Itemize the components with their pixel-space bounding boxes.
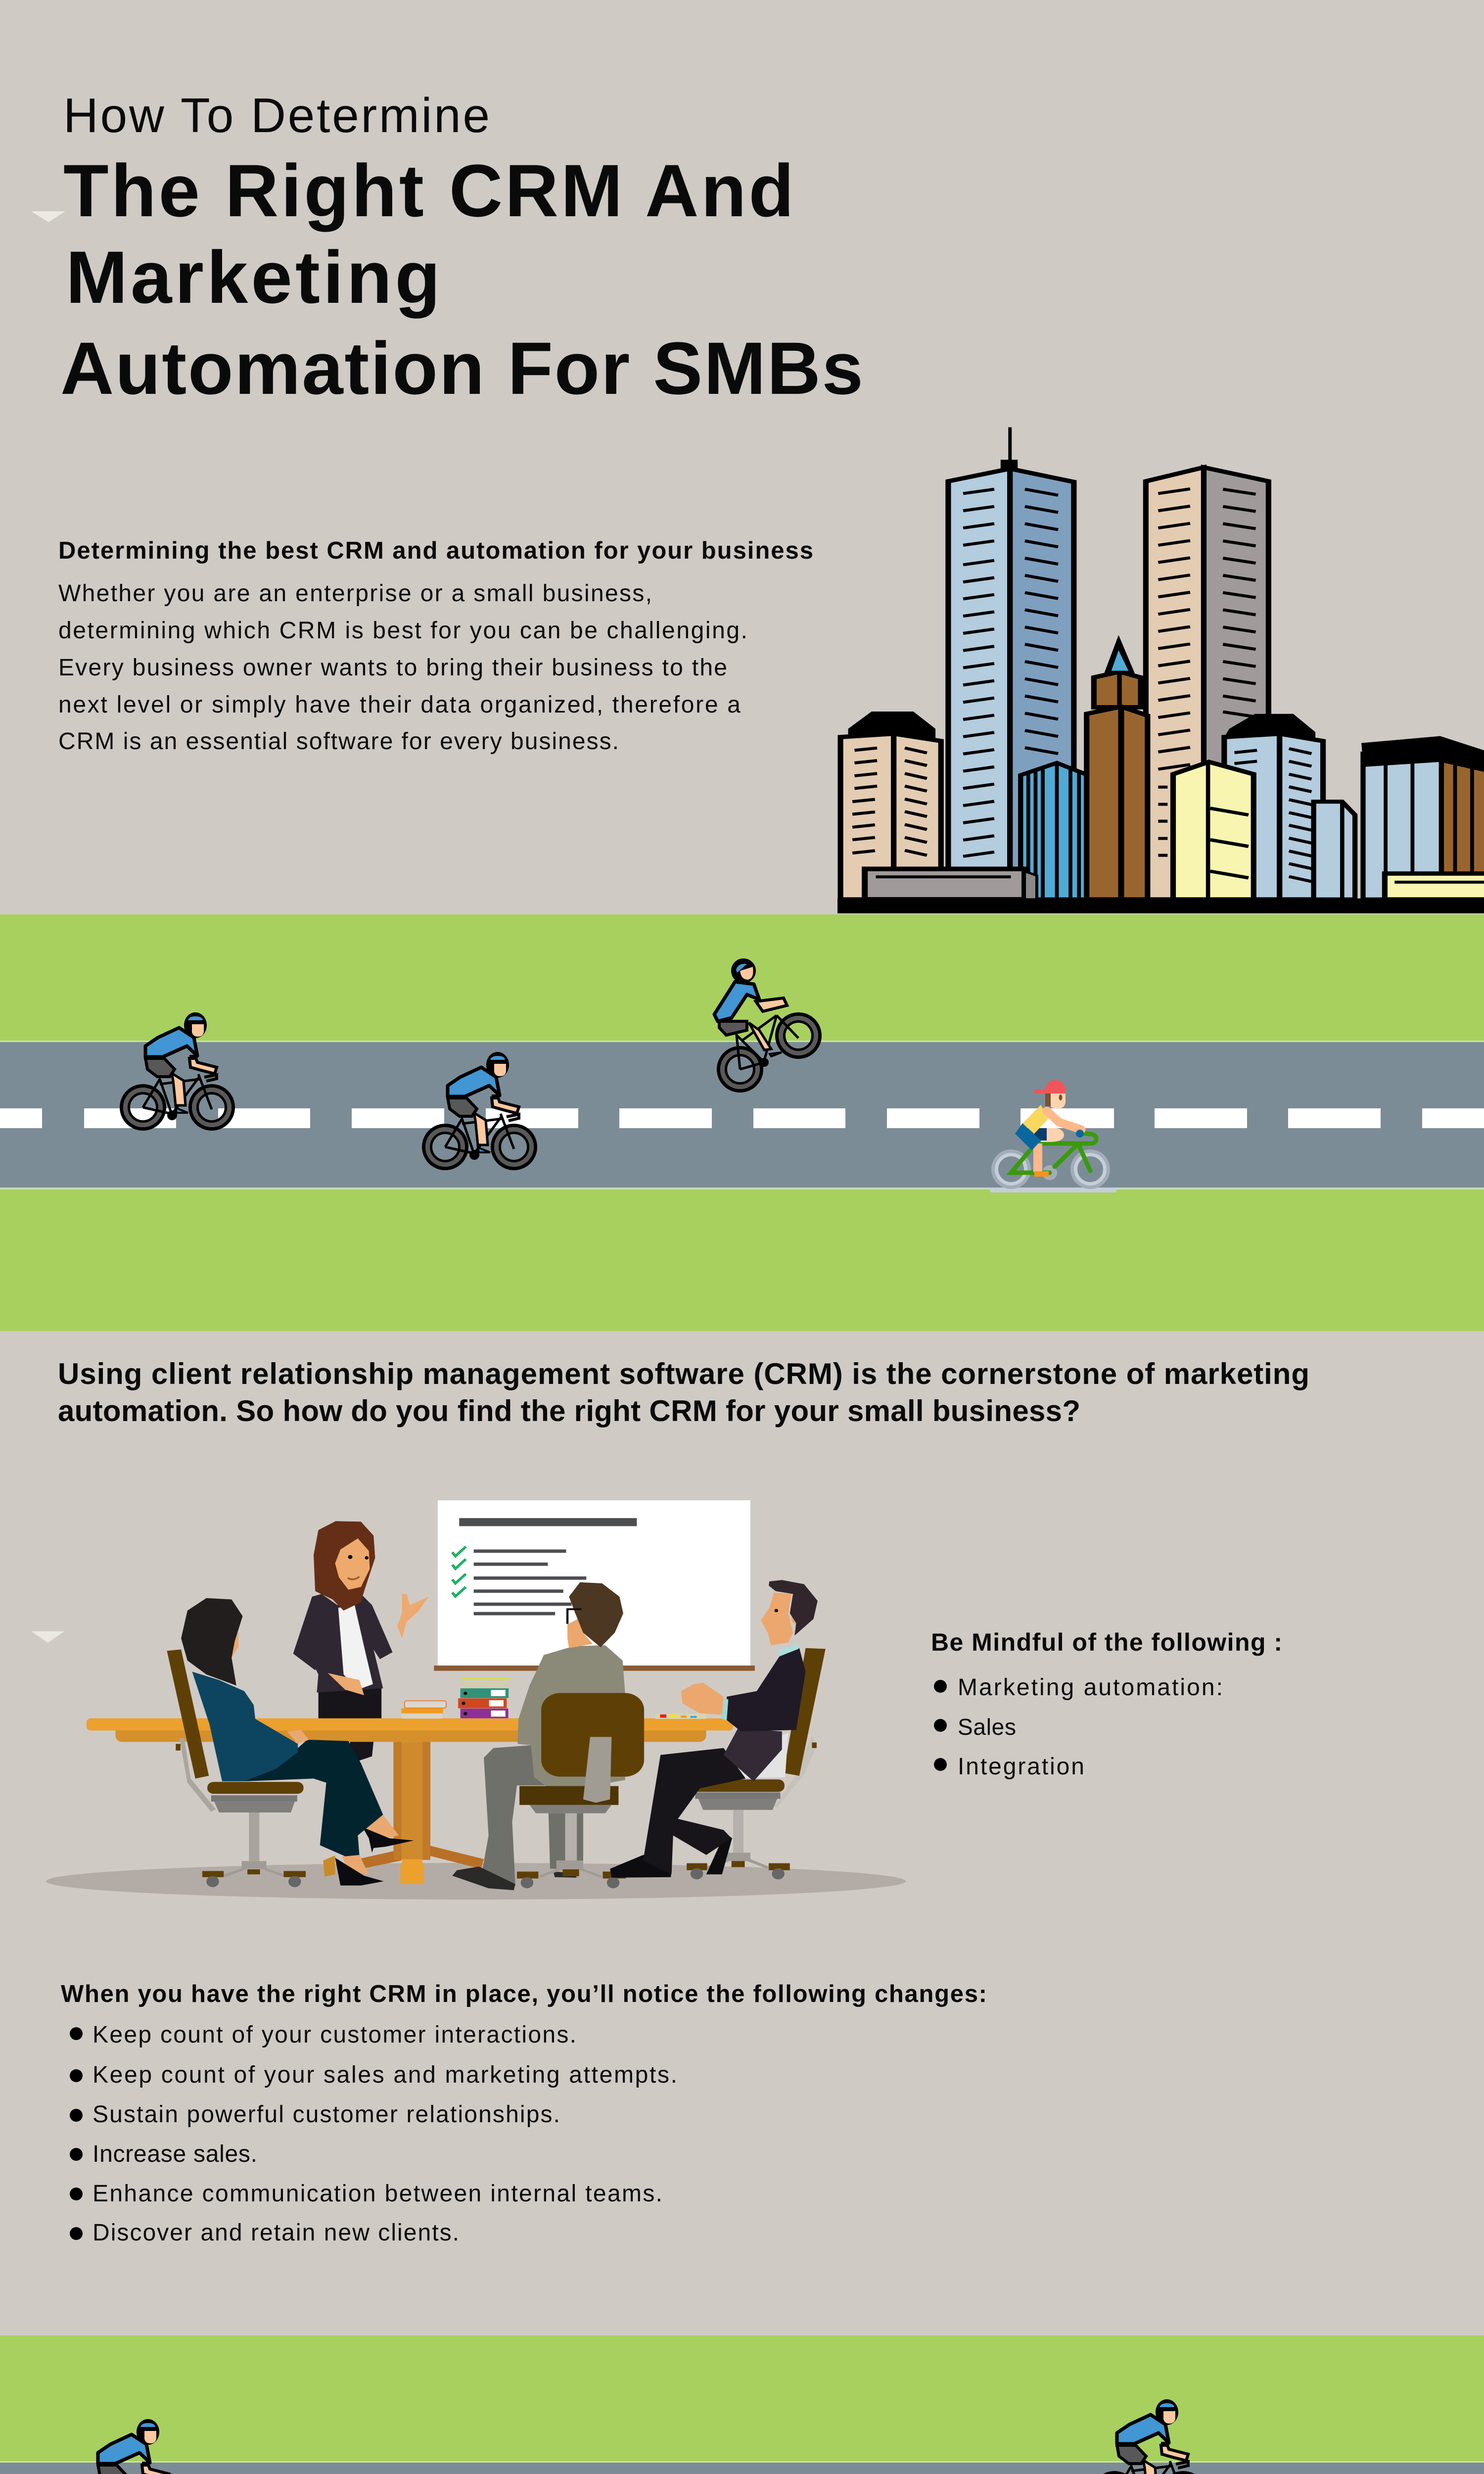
text block: changes list: When you have the right CRM in place, you’ll notice the following changes:: [61, 1981, 987, 2007]
man from behind: [452, 1582, 644, 1890]
text block: introduction: [58, 537, 813, 755]
title: Marketing: [66, 236, 440, 319]
text block: introduction: determining which CRM is best for you can be challenging.: [58, 618, 747, 644]
decorative marker: middle triangle: [31, 1631, 64, 1643]
text block: introduction: CRM is an essential software for every business.: [58, 728, 619, 755]
heading: cornerstone statement: Using client relationship management software (CRM) is the cornerstone of marketing: [58, 1357, 1309, 1390]
icon: cyclist 3 on road 2: [1093, 2399, 1205, 2474]
icon: cyclist doing a wheelie on road 1: [714, 958, 820, 1091]
people and table: [87, 1500, 826, 1890]
text block: be mindful list: Marketing automation:: [958, 1674, 1223, 1701]
text block: introduction: Every business owner wants to bring their business to the: [58, 655, 727, 681]
text block: changes list: Keep count of your sales and marketing attempts.: [93, 2062, 677, 2088]
illustration: city skyline: [837, 428, 1484, 913]
title: How To Determine: [63, 88, 490, 143]
title: [60, 88, 863, 410]
text block: be mindful list: Integration: [958, 1754, 1084, 1780]
icon: cyclist 2 on road 1: [423, 1052, 535, 1169]
heading: cornerstone statement: [58, 1357, 1309, 1427]
text block: changes list: [61, 1981, 987, 2246]
text block: introduction: next level or simply have their data organized, therefore a: [58, 692, 741, 718]
man in suit: [610, 1580, 826, 1879]
book stacks: [401, 1678, 706, 1719]
text block: introduction: Determining the best CRM and automation for your business: [58, 537, 813, 564]
heading: cornerstone statement: automation. So how do you find the right CRM for your small business?: [58, 1394, 1080, 1427]
text block: changes list: Enhance communication between internal teams.: [93, 2181, 662, 2207]
panel: green field with road 2: [0, 2335, 1484, 2474]
text block: introduction: Whether you are an enterprise or a small business,: [58, 580, 652, 607]
text block: changes list: Discover and retain new clients.: [93, 2220, 459, 2246]
standing woman: [293, 1521, 429, 1761]
table top: [87, 1718, 733, 1742]
floor shadow: [46, 1863, 906, 1900]
illustration: meeting room scene: [46, 1500, 906, 1900]
title: Automation For SMBs: [60, 327, 863, 410]
decorative marker: top triangle: [31, 211, 65, 222]
text block: changes list: Sustain powerful customer relationships.: [93, 2101, 560, 2128]
whiteboard: [434, 1500, 755, 1671]
icon: cyclist 1 on road 2: [74, 2419, 186, 2474]
text block: changes list: Keep count of your customer interactions.: [93, 2022, 576, 2048]
panel: green field with road 1: [0, 914, 1484, 1331]
title: The Right CRM And: [63, 149, 794, 232]
text block: changes list: Increase sales.: [93, 2141, 257, 2167]
table legs and base: [323, 1742, 484, 1884]
icon: cyclist 1 on road 1: [122, 1012, 233, 1129]
text block: be mindful list: Sales: [958, 1714, 1016, 1740]
sitting woman chair: [167, 1650, 306, 1887]
sitting woman: [181, 1598, 414, 1886]
text block: be mindful list: Be Mindful of the following :: [931, 1628, 1282, 1656]
text block: be mindful list: [931, 1628, 1282, 1780]
icon: red cap cyclist on road 1: [990, 1080, 1116, 1192]
